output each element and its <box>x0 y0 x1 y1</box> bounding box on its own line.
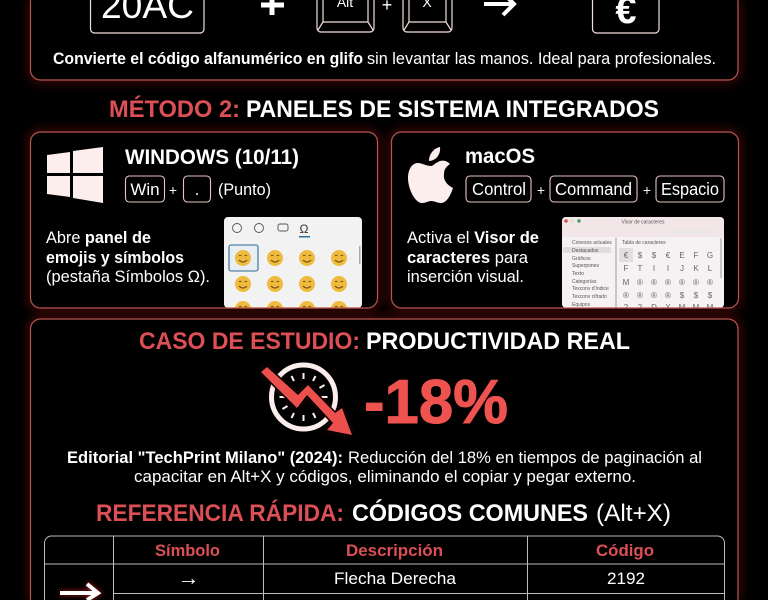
text: descripción macOS: inserción visual. <box>407 268 524 286</box>
text: descripción macOS: Activa el Visor de <box>407 229 539 247</box>
title: macOS: macOS <box>465 145 535 168</box>
text: descripción Windows: emojis y símbolos <box>46 249 184 267</box>
heading: referencia rápida: CÓDIGOS COMUNES <box>352 499 588 527</box>
screenshot: visor de caracteres: Categorías <box>572 279 597 285</box>
text: caso editorial <box>67 449 702 486</box>
heading: método 2: MÉTODO 2: <box>109 95 240 123</box>
heading: referencia rápida <box>96 499 671 527</box>
table: códigos comunes: Símbolo <box>155 542 220 560</box>
screenshot: visor de caracteres: $ <box>638 251 643 260</box>
heading: referencia rápida: (Alt+X) <box>596 500 671 527</box>
screenshot: visor de caracteres: ® <box>679 278 685 287</box>
panel: Windows <box>30 132 378 317</box>
screenshot: visor de caracteres: $ <box>652 251 657 260</box>
text: caso editorial: capacitar en Alt+X y códigos, eliminando el copiar y pegar externo. <box>134 468 636 486</box>
icon: Apple logo <box>408 147 453 203</box>
shortcut: Control + Command + Espacio <box>466 176 724 202</box>
screenshot: visor de caracteres: I <box>653 264 655 273</box>
screenshot: visor de caracteres: 2 <box>624 303 629 312</box>
table: códigos comunes: → <box>178 565 200 590</box>
shortcut: Win + punto: Win <box>130 180 160 199</box>
shortcut: Win + punto <box>126 176 271 202</box>
shortcut: Win + punto: . <box>195 180 199 199</box>
screenshot: panel de emojis <box>224 217 362 317</box>
heading: caso de estudio: CASO DE ESTUDIO: <box>139 328 360 355</box>
table: códigos comunes: Descripción <box>346 542 443 560</box>
screenshot: visor de caracteres: K <box>693 264 699 273</box>
text: descripción Windows <box>46 229 210 286</box>
screenshot: visor de caracteres: Gráficos <box>572 256 591 262</box>
screenshot: visor de caracteres: Texconv d'índice <box>572 286 609 292</box>
shortcut: Control + Command + Espacio: Espacio <box>661 179 719 199</box>
screenshot: visor de caracteres: D <box>651 303 657 312</box>
shortcut: Control + Command + Espacio: Control <box>472 179 526 199</box>
panel: caso de estudio <box>30 319 738 600</box>
table: códigos comunes: 2192 <box>607 569 645 588</box>
text: descripción método 1: sin levantar las manos. Ideal para profesionales. <box>367 50 716 68</box>
text: caso editorial: Editorial "TechPrint Milano" (2024): <box>67 449 343 467</box>
screenshot: visor de caracteres: ® <box>707 278 713 287</box>
shortcut: Control + Command + Espacio: Command <box>555 179 632 199</box>
heading: caso de estudio <box>139 328 630 355</box>
heading: referencia rápida: REFERENCIA RÁPIDA: <box>96 499 344 527</box>
icon: plus <box>261 0 284 15</box>
screenshot: panel de emojis: Ω <box>300 222 308 236</box>
stat: -18%: -18% <box>364 368 508 437</box>
screenshot: visor de caracteres: F <box>694 251 699 260</box>
screenshot: visor de caracteres: F <box>624 264 629 273</box>
table: códigos comunes: Código <box>596 542 654 560</box>
key: euro <box>592 0 659 33</box>
screenshot: visor de caracteres: M <box>707 303 714 312</box>
screenshot: visor de caracteres: M <box>693 303 700 312</box>
heading: caso de estudio: PRODUCTIVIDAD REAL <box>366 328 630 355</box>
text: descripción Windows: (pestaña Símbolos Ω). <box>46 268 210 286</box>
shortcut: Control + Command + Espacio: + <box>643 182 651 198</box>
text: descripción Windows: Abre panel de <box>46 229 151 247</box>
screenshot: visor de caracteres: $ <box>694 291 699 300</box>
screenshot: visor de caracteres: ® <box>665 278 671 287</box>
shortcut: Win + punto: (Punto) <box>218 181 271 199</box>
shortcut: Control + Command + Espacio: + <box>537 182 545 198</box>
screenshot: visor de caracteres: ® <box>665 291 671 300</box>
screenshot: visor de caracteres: L <box>708 264 713 273</box>
screenshot: visor de caracteres: ® <box>693 278 699 287</box>
screenshot: visor de caracteres: € <box>666 251 671 260</box>
screenshot: visor de caracteres <box>562 217 724 312</box>
table: códigos comunes <box>44 536 725 600</box>
screenshot: visor de caracteres: € <box>624 251 629 260</box>
text: descripción método 1: Convierte el código alfanumérico en glifo <box>53 50 363 68</box>
screenshot: visor de caracteres: ® <box>637 278 643 287</box>
icon: flecha de la fila <box>60 584 98 600</box>
text: caso editorial: Reducción del 18% en tiempos de paginación al <box>348 449 702 467</box>
screenshot: visor de caracteres: M <box>679 303 686 312</box>
screenshot: visor de caracteres: Equipos <box>572 302 591 308</box>
icon: Windows logo <box>47 147 103 203</box>
screenshot: visor de caracteres: Texto <box>572 271 584 277</box>
heading: método 2: PANELES DE SISTEMA INTEGRADOS <box>246 96 659 123</box>
screenshot: visor de caracteres: $ <box>680 291 685 300</box>
screenshot: visor de caracteres: 2 <box>638 303 643 312</box>
text: descripción macOS <box>407 229 539 286</box>
screenshot: visor de caracteres: J <box>680 264 684 273</box>
title: Windows: WINDOWS (10/11) <box>125 146 299 169</box>
key: 20AC <box>90 0 204 33</box>
screenshot: visor de caracteres: E <box>679 251 685 260</box>
screenshot: visor de caracteres: Superpones <box>572 263 599 269</box>
screenshot: visor de caracteres: Texconv cifrado <box>572 294 607 300</box>
icon: reloj con flecha descendente <box>261 365 352 435</box>
screenshot: visor de caracteres: G <box>707 251 713 260</box>
screenshot: visor de caracteres: Destacados <box>572 248 599 254</box>
screenshot: visor de caracteres: Tabla de caracteres <box>622 240 666 246</box>
text: descripción macOS: caracteres para <box>407 249 529 267</box>
shortcut: Win + punto: + <box>169 182 177 198</box>
screenshot: visor de caracteres: M <box>623 278 630 287</box>
key: Alt <box>317 0 374 32</box>
heading: método 2 <box>109 95 659 123</box>
screenshot: visor de caracteres: ® <box>637 291 643 300</box>
screenshot: visor de caracteres: T <box>638 264 643 273</box>
panel: método 1 atajo Alt+X <box>30 0 738 80</box>
screenshot: visor de caracteres: ® <box>651 278 657 287</box>
screenshot: visor de caracteres: ® <box>623 291 629 300</box>
screenshot: visor de caracteres: Conexos actuales <box>572 240 612 246</box>
screenshot: visor de caracteres: $ <box>708 291 713 300</box>
screenshot: visor de caracteres: Visor de caracteres <box>622 220 665 226</box>
screenshot: visor de caracteres: X <box>665 303 671 312</box>
key: X <box>403 0 452 32</box>
text: descripción método 1 <box>53 50 716 68</box>
screenshot: visor de caracteres: I <box>667 264 669 273</box>
screenshot: visor de caracteres: ® <box>651 291 657 300</box>
icon: arrow <box>484 0 514 15</box>
panel: macOS <box>392 132 738 312</box>
table: códigos comunes: Flecha Derecha <box>334 569 457 588</box>
